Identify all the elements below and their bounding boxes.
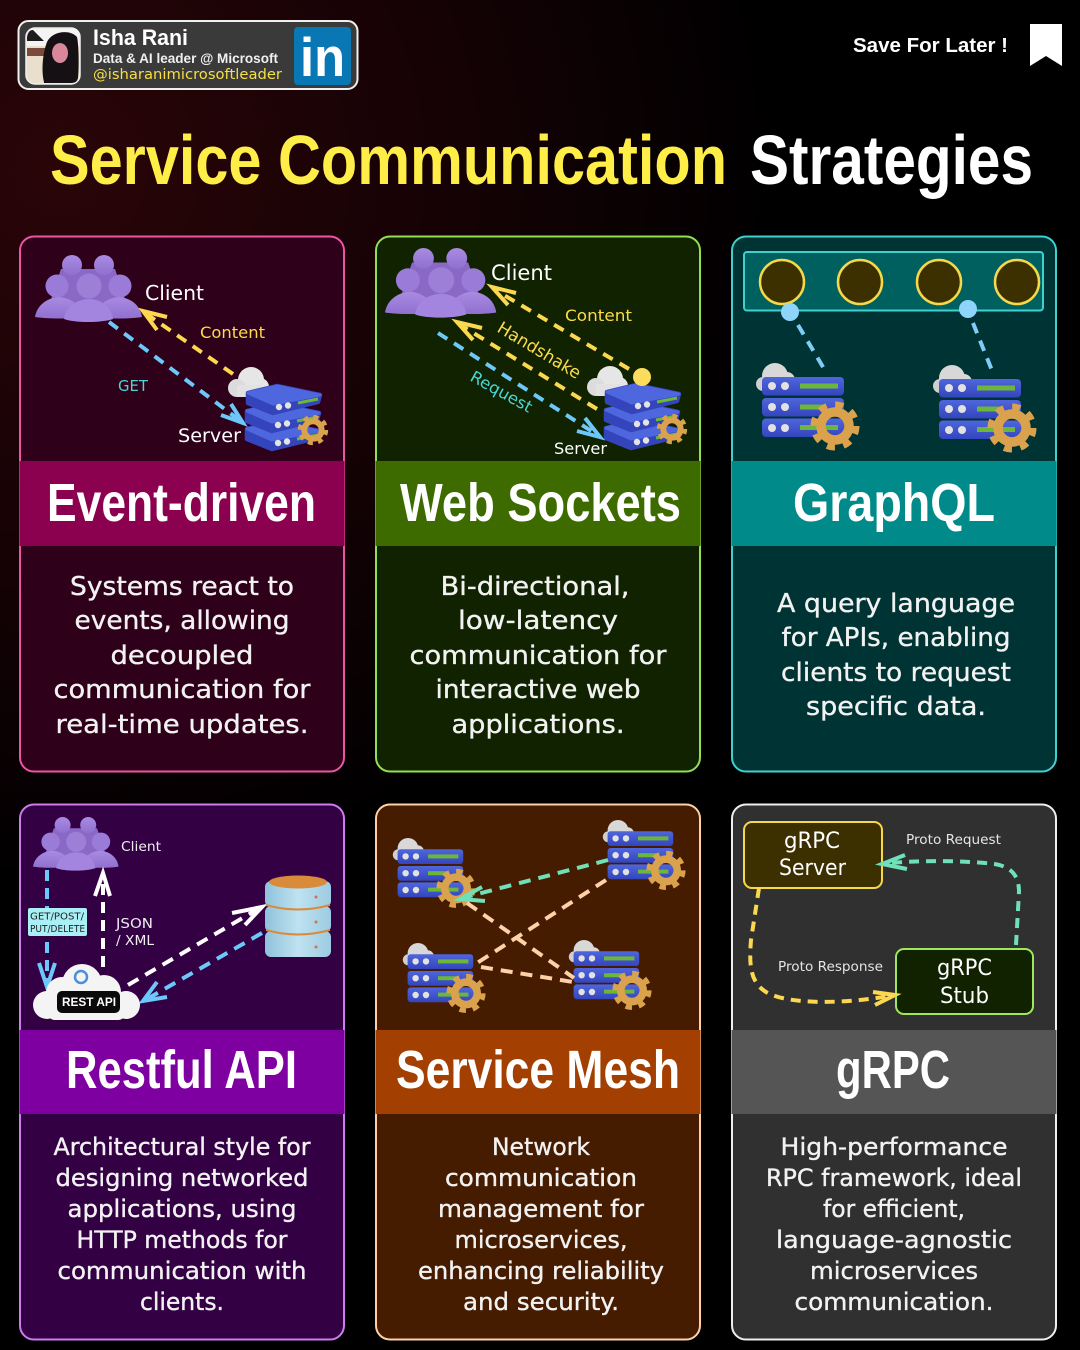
band: graphql <box>732 461 1056 546</box>
heading: web sockets: Web Sockets <box>400 473 681 533</box>
diagram: event-driven: Client <box>145 281 204 305</box>
profile card <box>18 21 358 89</box>
text: grpc description: for efficient, <box>823 1195 965 1223</box>
text: web sockets description <box>410 572 667 740</box>
diagram: grpc: gRPC <box>937 956 992 981</box>
text: restful api description: HTTP methods for <box>76 1226 288 1254</box>
diagram: web sockets: Server <box>554 439 607 458</box>
title: Strategies <box>750 121 1033 199</box>
diagram: web sockets: Request <box>467 367 536 416</box>
text: grpc description: RPC framework, ideal <box>766 1164 1022 1192</box>
heading: graphql: GraphQL <box>793 473 995 533</box>
icon: linkedin: in <box>300 26 345 88</box>
diagram: web sockets: Client <box>491 261 552 285</box>
diagram: web sockets: Content <box>565 306 632 325</box>
save for later: Save For Later ! <box>853 35 1008 57</box>
diagram: grpc: gRPC <box>784 829 840 854</box>
diagram: grpc: Proto Response <box>778 960 883 975</box>
text: graphql description: for APIs, enabling <box>782 623 1010 653</box>
diagram: restful api: / XML <box>116 934 155 949</box>
diagram: grpc: Proto Request <box>906 833 1001 848</box>
band: restful api <box>20 1030 344 1114</box>
text: service mesh description: management for <box>438 1195 644 1223</box>
text: graphql description: specific data. <box>806 692 986 722</box>
diagram: restful api: GET/POST/ <box>30 912 85 922</box>
text: event-driven description <box>54 572 311 740</box>
text: graphql description: A query language <box>777 589 1015 619</box>
diagram: restful api: JSON <box>115 917 153 932</box>
heading: event-driven: Event-driven <box>47 473 316 533</box>
diagram: grpc: Stub <box>940 984 989 1009</box>
diagram: web sockets: Handshake <box>493 318 584 384</box>
text: event-driven description: decoupled <box>110 641 254 671</box>
text: service mesh description: communication <box>445 1164 637 1192</box>
panel: graphql <box>732 236 1056 772</box>
diagram: event-driven: Content <box>200 323 265 342</box>
profile photo <box>26 28 80 84</box>
text: graphql description: clients to request <box>781 658 1011 688</box>
panel: web sockets <box>376 236 700 772</box>
text: web sockets description: low-latency <box>458 606 618 636</box>
text: web sockets description: communication for <box>410 641 667 671</box>
text: event-driven description: events, allowing <box>74 606 290 636</box>
text: web sockets description: Bi-directional, <box>440 572 630 602</box>
text: restful api description: designing networked <box>56 1164 308 1192</box>
diagram: event-driven <box>35 255 326 449</box>
text: restful api description <box>54 1133 311 1316</box>
icon: bookmark <box>1030 24 1062 66</box>
text: grpc description: microservices <box>810 1257 978 1285</box>
panel: event-driven <box>20 236 344 772</box>
text: event-driven description: communication for <box>54 675 311 705</box>
heading: restful api: Restful API <box>66 1040 297 1100</box>
text: service mesh description: and security. <box>463 1288 619 1316</box>
panel: restful api <box>20 804 344 1340</box>
text: event-driven description: real-time updates. <box>56 710 308 740</box>
diagram: restful api: REST API <box>62 995 116 1009</box>
text: service mesh description: microservices, <box>454 1226 628 1254</box>
diagram: restful api: PUT/DELETE <box>30 924 85 935</box>
text: grpc description: High-performance <box>780 1133 1008 1161</box>
diagram: service mesh <box>393 820 683 1010</box>
diagram: restful api <box>28 817 331 1020</box>
text: grpc description <box>766 1133 1022 1316</box>
text: grpc description: language-agnostic <box>776 1226 1012 1254</box>
text: web sockets description: applications. <box>452 710 624 740</box>
profile name: Isha Rani <box>93 25 188 50</box>
band: event-driven <box>20 461 344 546</box>
text: restful api description: Architectural style for <box>54 1133 311 1161</box>
text: restful api description: communication with <box>58 1257 306 1285</box>
title: Service Communication <box>50 121 727 199</box>
text: grpc description: communication. <box>794 1288 994 1316</box>
panel: grpc <box>732 804 1056 1340</box>
text: graphql description <box>777 589 1015 722</box>
diagram: event-driven: Server <box>178 425 241 447</box>
diagram: restful api: Client <box>121 840 161 855</box>
text: service mesh description: Network <box>492 1133 590 1161</box>
text: service mesh description: enhancing reliability <box>418 1257 664 1285</box>
heading: grpc: gRPC <box>836 1040 950 1100</box>
panel: service mesh <box>376 804 700 1340</box>
heading: service mesh: Service Mesh <box>396 1040 680 1100</box>
band: service mesh <box>376 1030 700 1114</box>
profile role: Data & AI leader @ Microsoft <box>93 50 278 66</box>
diagram: grpc: Server <box>779 856 847 881</box>
band: web sockets <box>376 461 700 546</box>
profile handle: @isharanimicrosoftleader <box>93 67 282 83</box>
diagram: web sockets <box>385 248 685 458</box>
text: web sockets description: interactive web <box>436 675 640 705</box>
text: event-driven description: Systems react to <box>70 572 294 602</box>
band: grpc <box>732 1030 1056 1114</box>
text: restful api description: applications, using <box>68 1195 296 1223</box>
diagram: grpc <box>744 822 1033 1014</box>
text: restful api description: clients. <box>140 1288 224 1316</box>
diagram: graphql <box>744 252 1043 449</box>
text: service mesh description <box>418 1133 664 1316</box>
diagram: event-driven: GET <box>118 377 149 395</box>
